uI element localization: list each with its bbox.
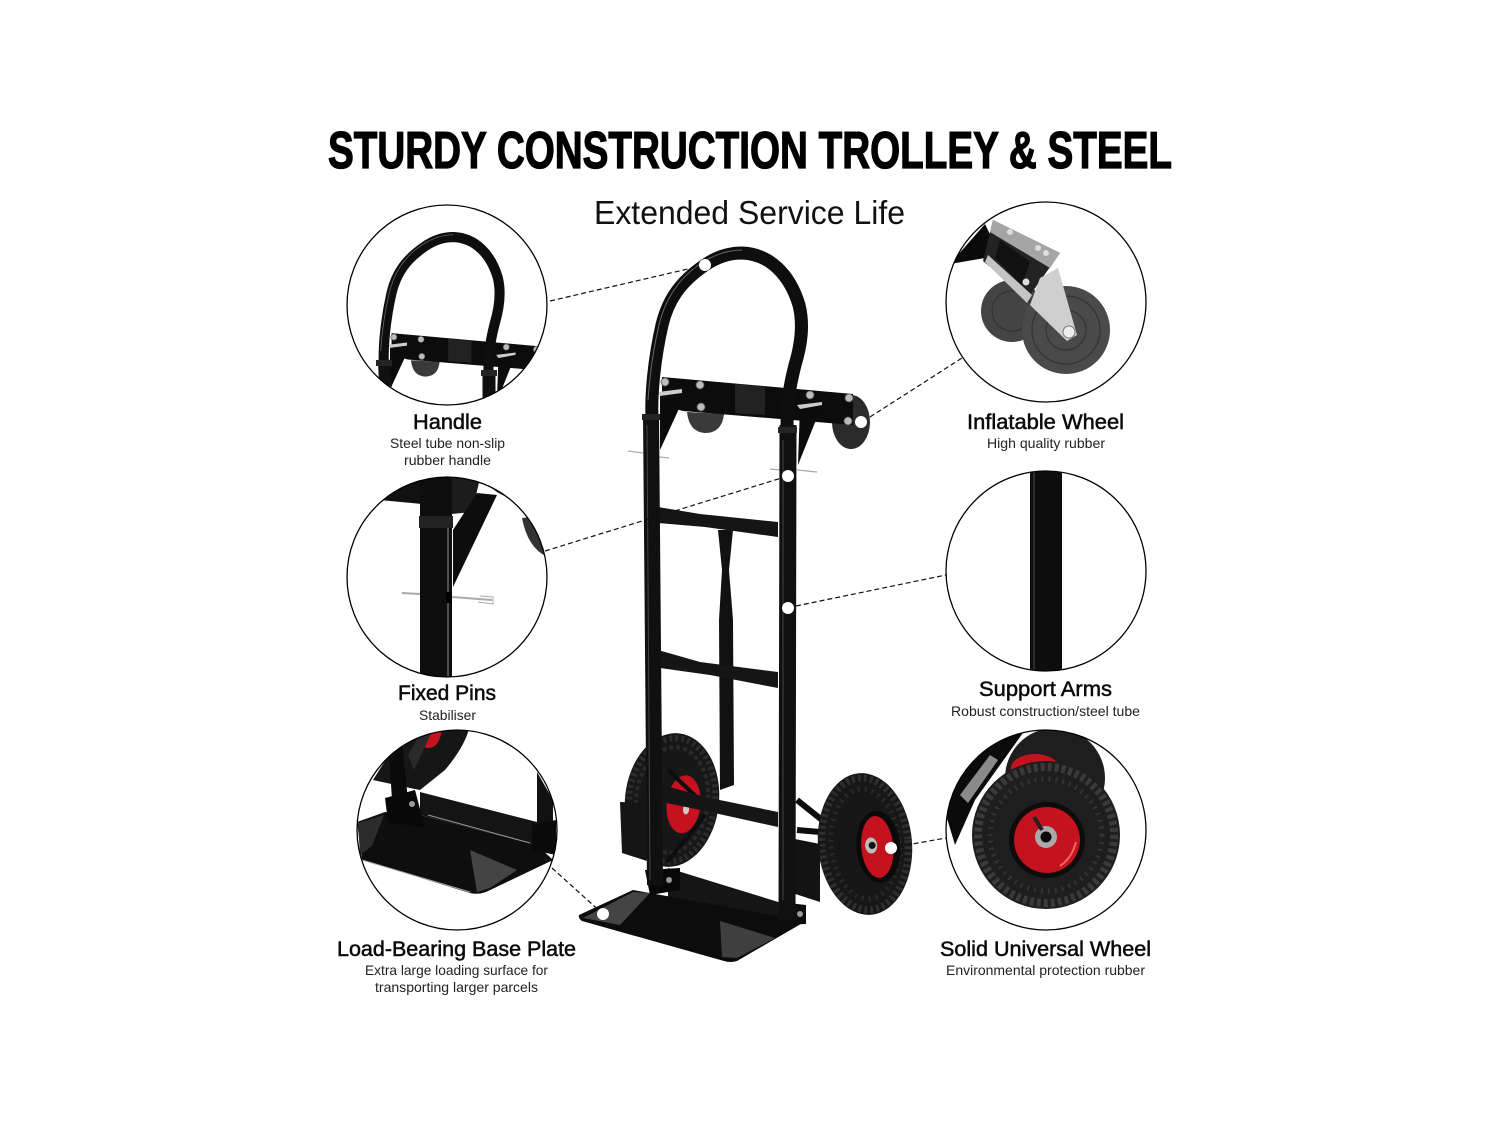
left brace (660, 395, 683, 450)
handle detail image (376, 232, 538, 398)
panel: load-bearing base plate (337, 725, 576, 995)
bracket highlights (658, 389, 822, 409)
right wheel guard (783, 837, 820, 902)
support arms description: Robust construction/steel tube (951, 703, 1140, 719)
panel: handle (347, 205, 553, 468)
wheel detail image (947, 730, 1120, 909)
inflatable wheel heading: Inflatable Wheel (967, 411, 1124, 434)
steel handle tube (652, 253, 802, 428)
rear strut to right wheel (797, 800, 822, 832)
title: STURDY CONSTRUCTION TROLLEY & STEEL (328, 122, 1172, 180)
mounting plate (662, 377, 853, 425)
cross bar 3 (662, 785, 778, 827)
base plate rear wall (668, 868, 788, 925)
base plate (579, 890, 806, 962)
fixed pins detail image (384, 478, 544, 676)
fixed pins description: Stabiliser (419, 707, 476, 723)
support tube detail image (1030, 472, 1062, 670)
base plate description: transporting larger parcels (375, 979, 538, 995)
callout dots (597, 259, 897, 920)
left wheel guard (620, 802, 650, 862)
left main tube (651, 414, 655, 885)
right wheel (812, 769, 918, 919)
handle description: Steel tube non-slip (390, 435, 505, 451)
right brace (798, 405, 822, 465)
panel: solid universal wheel (940, 728, 1151, 978)
upper cross bar 1 (658, 507, 778, 537)
right base hinge (780, 902, 806, 925)
fixed pins heading: Fixed Pins (398, 682, 496, 705)
tube highlights (647, 425, 783, 900)
central support strut (718, 530, 734, 790)
left caster wheel (687, 412, 724, 433)
cross bar 2 (658, 650, 778, 688)
handle heading: Handle (413, 411, 482, 434)
left wheel (618, 728, 726, 872)
subtitle: Extended Service Life (594, 194, 905, 231)
handle description (390, 435, 505, 468)
fixed pins (628, 451, 669, 458)
support arms heading: Support Arms (979, 678, 1112, 701)
base plate detail image (358, 730, 556, 894)
plate highlight (735, 384, 765, 415)
tube collars (642, 414, 797, 433)
base plate description (365, 962, 548, 995)
left base hinge (645, 868, 680, 895)
panel: inflatable wheel (946, 202, 1146, 451)
callout lines (545, 265, 962, 914)
right caster wheel (832, 395, 870, 449)
base plate heading: Load-Bearing Base Plate (337, 938, 576, 961)
bolts (661, 378, 669, 386)
left lower brace (667, 770, 705, 862)
universal wheel description: Environmental protection rubber (946, 962, 1145, 978)
universal wheel heading: Solid Universal Wheel (940, 938, 1151, 961)
swivel caster detail image (954, 220, 1110, 374)
central hand trolley product illustration (579, 250, 918, 962)
panel: fixed pins (347, 465, 550, 723)
base plate description: Extra large loading surface for (365, 962, 548, 978)
base plate highlights (583, 892, 650, 925)
panel: support arms (946, 465, 1146, 719)
handle highlight (648, 250, 742, 400)
handle description: rubber handle (404, 452, 491, 468)
right main tube (787, 425, 788, 920)
inflatable wheel description: High quality rubber (987, 435, 1105, 451)
